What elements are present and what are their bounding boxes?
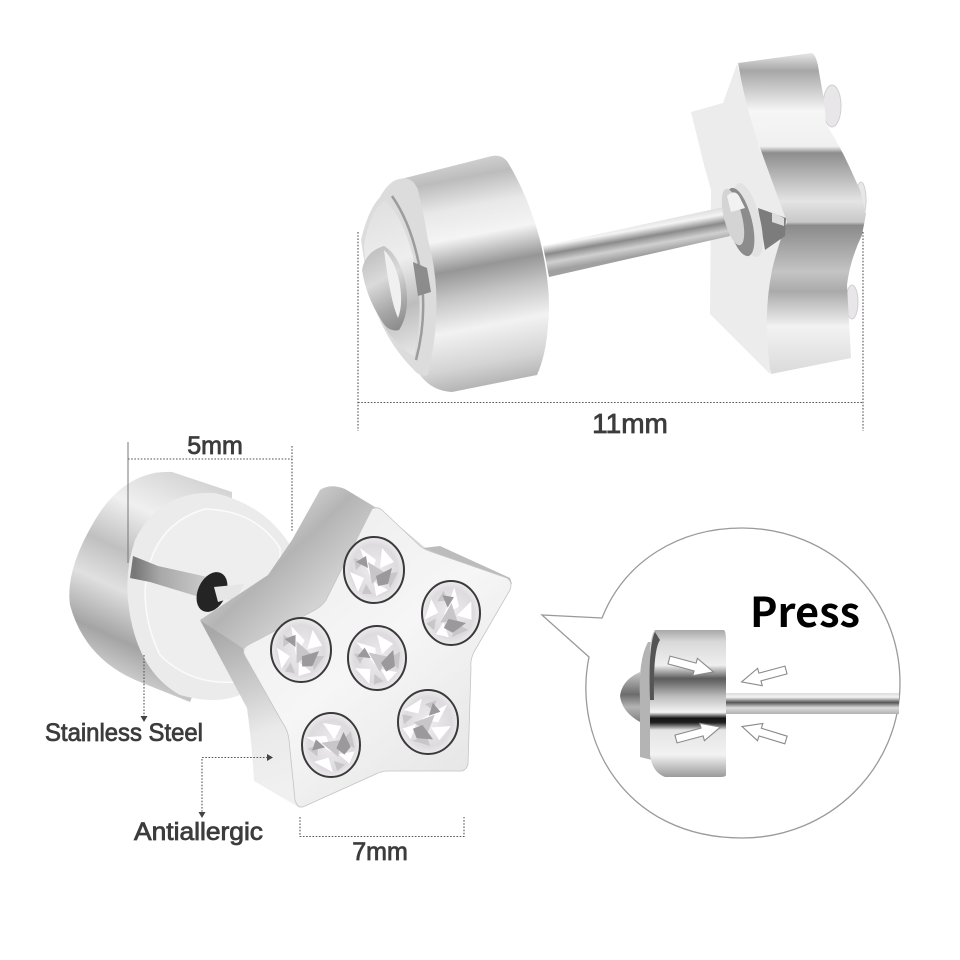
back barrel body — [397, 156, 549, 392]
nut tip — [362, 246, 407, 330]
peeking crystals — [823, 85, 866, 319]
disc rim shading — [392, 196, 423, 360]
disc inner face — [145, 509, 280, 682]
disc reflection streak — [130, 556, 236, 600]
7mm label: 7mm — [352, 838, 408, 866]
crystal 5 — [298, 713, 366, 780]
nut highlight — [384, 250, 401, 318]
crystal 1 — [344, 537, 404, 603]
crystal 3 — [347, 626, 408, 691]
star side upper — [200, 486, 512, 648]
crystal 6 — [398, 690, 458, 754]
star side lower — [200, 620, 300, 808]
rim reflection — [413, 262, 431, 296]
post stub — [214, 584, 244, 602]
press arrow lower outer — [739, 718, 789, 749]
inset post — [725, 693, 899, 714]
disc inner — [364, 200, 420, 356]
5mm dimension — [128, 432, 292, 563]
star face — [244, 508, 511, 807]
stainless steel label: Stainless Steel — [45, 719, 203, 747]
crystal 4 — [271, 618, 331, 682]
back cylinder — [69, 472, 232, 702]
earring front view (bottom left) — [69, 472, 512, 808]
barrel end disc — [361, 178, 436, 376]
press arrow upper inner — [667, 651, 716, 681]
11mm dimension — [358, 232, 863, 439]
inset barrel — [650, 630, 726, 777]
7mm dimension — [300, 817, 464, 866]
earring side view (top) — [361, 53, 866, 392]
inset nose — [620, 672, 640, 722]
collar — [717, 180, 786, 260]
crystal 2 — [416, 581, 484, 648]
star right side — [423, 546, 512, 584]
inset barrel crescent — [650, 632, 660, 700]
stainless steel callout — [45, 655, 203, 747]
post hole — [190, 567, 234, 617]
press arrow lower inner — [674, 718, 723, 748]
antiallergic callout — [134, 754, 273, 846]
star side wall — [738, 53, 866, 374]
5mm label: 5mm — [187, 432, 243, 460]
star back face — [691, 64, 790, 374]
disc outer ring — [127, 493, 291, 700]
antiallergic label: Antiallergic — [134, 818, 263, 846]
press arrow upper outer — [739, 661, 788, 691]
press label: Press — [750, 579, 860, 639]
inset disc edge — [640, 642, 652, 760]
crystals — [271, 537, 484, 780]
11mm label: 11mm — [592, 408, 668, 439]
post — [543, 207, 730, 277]
press callout bubble — [542, 528, 900, 838]
